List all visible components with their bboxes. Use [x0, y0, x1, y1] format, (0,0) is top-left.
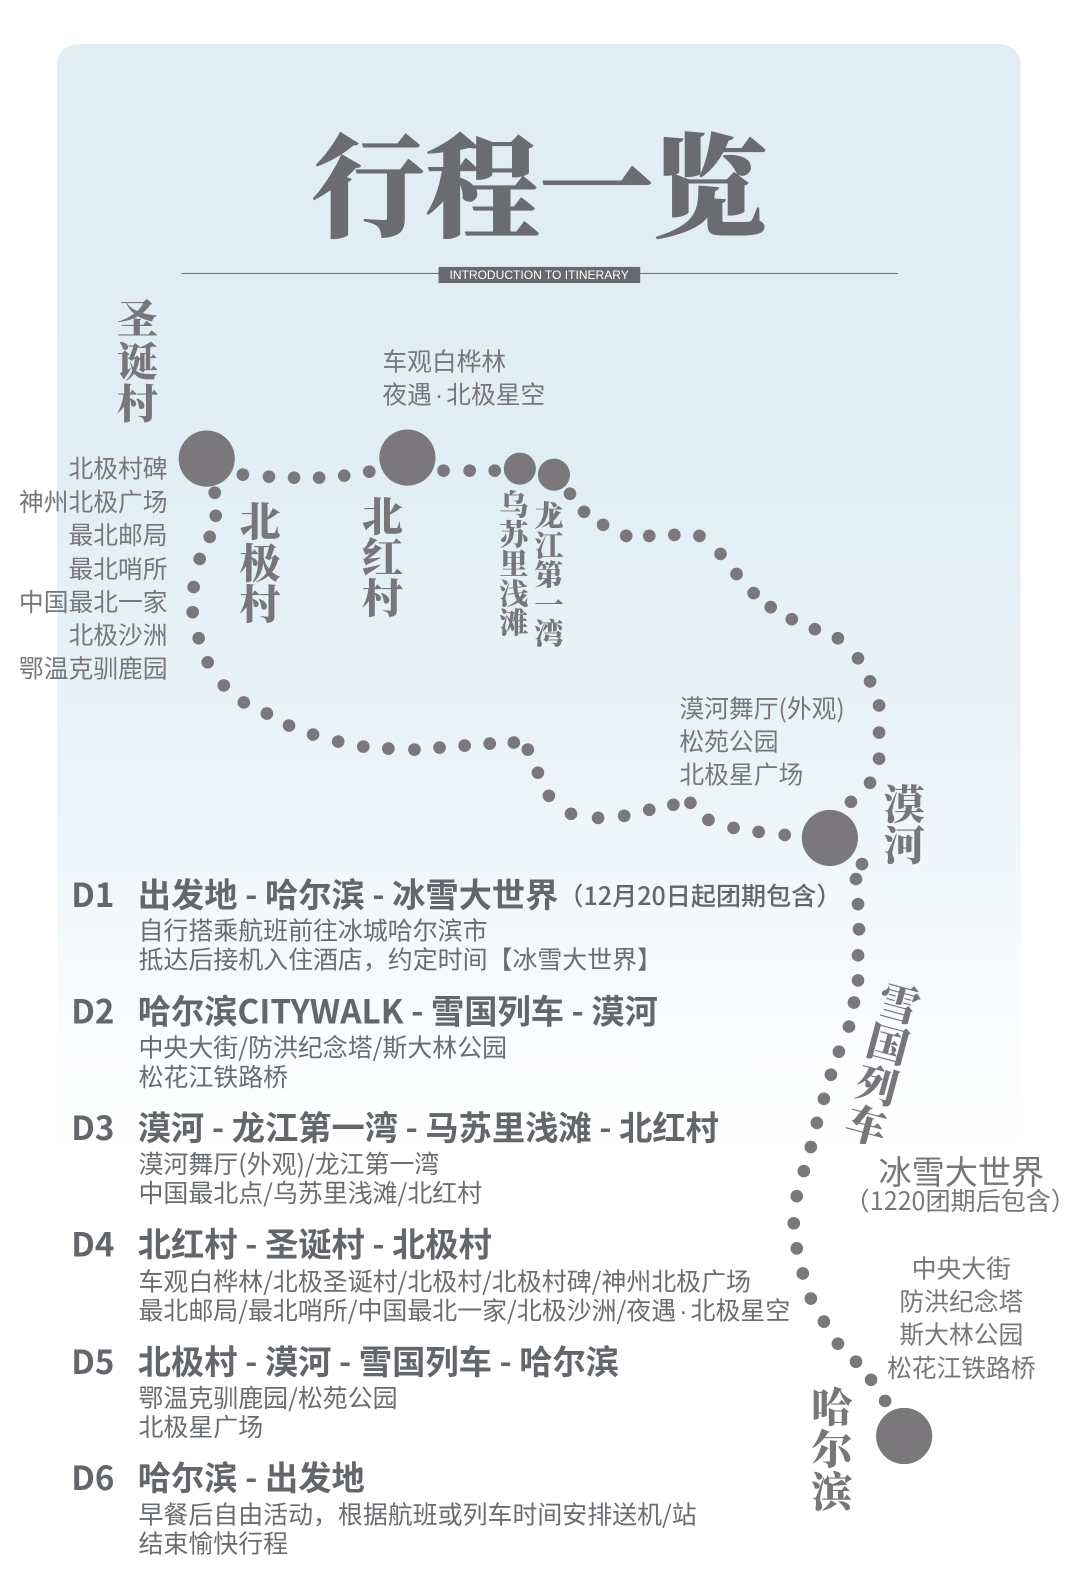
attractions: 北极村: 北极沙洲: [68, 616, 168, 652]
detail D6: [138, 1495, 697, 1560]
day 2: [71, 985, 658, 1094]
label D2: D2: [71, 985, 114, 1033]
day 3: [71, 1102, 719, 1210]
note: 团期: （1220团期后包含）: [845, 1182, 1076, 1218]
day 1: [71, 869, 841, 976]
detail D1: [138, 911, 662, 976]
place name: 圣诞村: 圣诞村: [117, 287, 158, 431]
detail D3: 漠河舞厅(外观)/龙江第一湾: [138, 1145, 439, 1181]
panel: background: [57, 44, 1020, 1158]
attractions: 北红村: [382, 342, 545, 411]
detail D5: [138, 1379, 398, 1444]
detail D4: 最北邮局/最北哨所/中国最北一家/北极沙洲/夜遇·北极星空: [138, 1291, 790, 1327]
attractions: 冰雪大世界: 冰雪大世界: [879, 1146, 1044, 1194]
stop: 圣诞村: [179, 431, 235, 487]
place name: 北极村: 北极村: [239, 489, 280, 631]
attractions: 北极村: 神州北极广场: [19, 483, 168, 519]
detail D4: [138, 1262, 790, 1327]
attractions: 北极村: 鄂温克驯鹿园: [19, 649, 168, 686]
day 6: [71, 1452, 697, 1560]
heading D3: 漠河 - 龙江第一湾 - 马苏里浅滩 - 北红村: [138, 1102, 719, 1150]
place name: 北红村: 北红村: [362, 484, 403, 625]
day 5: [71, 1336, 619, 1444]
attractions: 北极村: [19, 450, 168, 686]
attractions: 北极村: 最北邮局: [68, 516, 168, 552]
attractions: 漠河: 北极星广场: [679, 756, 803, 792]
detail D2: 松花江铁路桥: [138, 1058, 288, 1094]
heading D2: 哈尔滨CITYWALK - 雪国列车 - 漠河: [138, 985, 658, 1033]
detail D6: 结束愉快行程: [138, 1524, 288, 1560]
detail D4: 车观白桦林/北极圣诞村/北极村/北极村碑/神州北极广场: [138, 1262, 751, 1298]
heading D6: 哈尔滨 - 出发地: [138, 1452, 365, 1500]
detail D2: [138, 1029, 507, 1094]
place name: 龙江第一湾: 龙江第一湾: [534, 494, 563, 653]
label D5: D5: [71, 1336, 114, 1384]
label D6: D6: [71, 1452, 114, 1500]
title: 行程一览: [312, 101, 767, 260]
attractions: 哈尔滨: 斯大林公园: [899, 1315, 1023, 1351]
attractions: 北极村: 中国最北一家: [19, 583, 168, 619]
detail D3: [138, 1145, 482, 1210]
detail D1: 自行搭乘航班前往冰城哈尔滨市: [138, 911, 488, 947]
attractions: 哈尔滨: 防洪纪念塔: [899, 1282, 1023, 1318]
heading D4: 北红村 - 圣诞村 - 北极村: [138, 1218, 492, 1266]
detail D3: 中国最北点/乌苏里浅滩/北红村: [138, 1174, 482, 1210]
stop: 北红村: [379, 429, 436, 486]
attractions: 漠河: 松苑公园: [679, 723, 778, 759]
attractions: 哈尔滨: [887, 1249, 1036, 1384]
subtitle tag: INTRODUCTION TO ITINERARY: [449, 268, 629, 282]
place name: 雪国列车: 雪国列车: [839, 967, 927, 1157]
label D1: D1: [71, 869, 114, 917]
stop: 乌苏里浅滩: [504, 453, 536, 485]
dotted route: [186, 464, 891, 1407]
attractions: 北红村: 车观白桦林: [382, 342, 506, 378]
attractions: 北红村: 夜遇·北极星空: [382, 375, 545, 411]
detail D6: 早餐后自由活动，根据航班或列车时间安排送机/站: [138, 1495, 697, 1531]
detail D5: 鄂温克驯鹿园/松苑公园: [138, 1379, 398, 1415]
place name: 漠河: 漠河: [884, 772, 925, 872]
attractions: 漠河: [679, 689, 845, 792]
attractions: 哈尔滨: 中央大街: [912, 1249, 1011, 1285]
day 4: [71, 1218, 790, 1327]
stop: 龙江第一湾: [538, 459, 570, 491]
attractions: 北极村: 北极村碑: [68, 450, 168, 486]
detail D5: 北极星广场: [138, 1408, 263, 1444]
attractions: 北极村: 最北哨所: [68, 550, 168, 586]
detail D1: 抵达后接机入住酒店，约定时间【冰雪大世界】: [138, 940, 662, 976]
place name: 哈尔滨: 哈尔滨: [811, 1375, 852, 1518]
label D4: D4: [71, 1218, 114, 1266]
subtitle rule: [182, 273, 898, 274]
label D3: D3: [71, 1102, 114, 1150]
heading D5: 北极村 - 漠河 - 雪国列车 - 哈尔滨: [138, 1336, 619, 1384]
heading D1: 出发地 - 哈尔滨 - 冰雪大世界（12月20日起团期包含）: [138, 869, 841, 917]
place name: 乌苏里浅滩: 乌苏里浅滩: [499, 483, 528, 642]
stop: 漠河: [802, 810, 858, 866]
attractions: 漠河: 漠河舞厅(外观): [679, 689, 845, 726]
attractions: 哈尔滨: 松花江铁路桥: [887, 1348, 1036, 1384]
stop: 哈尔滨: [876, 1408, 932, 1464]
detail D2: 中央大街/防洪纪念塔/斯大林公园: [138, 1029, 507, 1065]
